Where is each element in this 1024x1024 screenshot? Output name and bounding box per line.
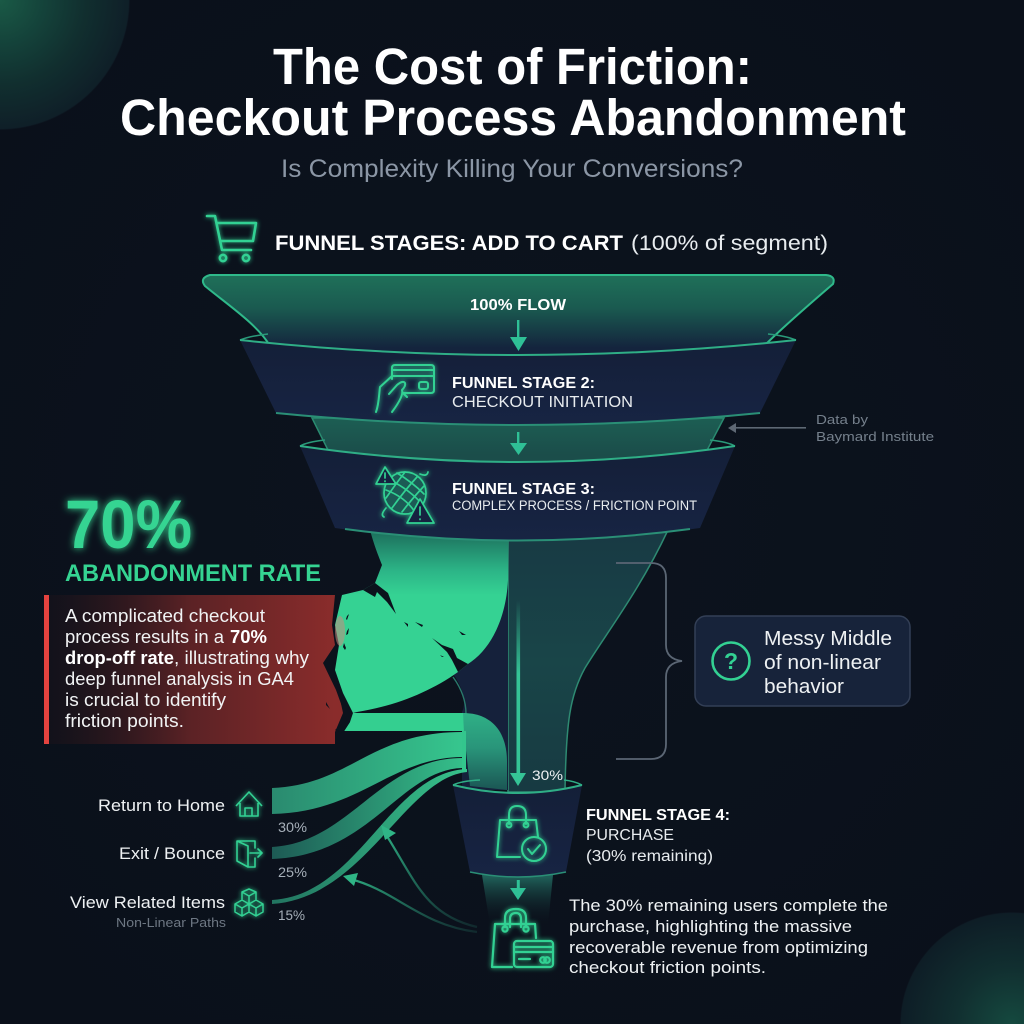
exit path: return to home	[272, 732, 462, 814]
brace: messy middle	[616, 563, 682, 759]
flow into lower funnel: strip	[344, 713, 464, 731]
arrow: non-linear return path two	[343, 873, 477, 932]
callout: messy middle	[695, 616, 910, 706]
arrow: retained 30 percent flow	[510, 600, 526, 786]
red panel torn edge	[335, 675, 343, 732]
stage 3 label: FUNNEL STAGE 3:	[452, 481, 595, 498]
callout text: 70%	[230, 627, 267, 647]
abandoned flow: torn green blob	[326, 530, 508, 713]
stage 4 label	[586, 807, 730, 865]
rim of stage 3	[300, 440, 735, 446]
torn dark edge	[323, 595, 358, 722]
title: The Cost of Friction:	[273, 38, 752, 95]
funnel navy interior	[420, 530, 508, 790]
callout text: process results in a	[65, 627, 225, 647]
retained flow: right teal funnel wall	[508, 530, 668, 792]
torn shard	[335, 720, 350, 733]
arrow: stage 4 to purchase	[510, 880, 526, 900]
callout text: Messy Middle	[764, 628, 892, 650]
15 percent exit: 15%	[278, 908, 305, 923]
summary text: purchase, highlighting the massive	[569, 918, 852, 936]
funnel tail below stage 4	[482, 875, 553, 925]
tear highlight	[335, 616, 345, 646]
stage 4 label: PURCHASE	[586, 827, 674, 844]
icon: question mark: ?	[724, 648, 738, 674]
icon: question mark	[712, 642, 750, 680]
arrow: pointer to funnel	[728, 423, 806, 433]
icon: door	[237, 841, 262, 867]
30 percent exit: 30%	[278, 820, 307, 835]
funnel stages heading: (100% of segment)	[631, 231, 828, 255]
funnel stage 4: purchase cup	[453, 780, 582, 877]
icon: bag with check	[497, 806, 546, 861]
title	[120, 38, 906, 146]
callout text: behavior	[764, 676, 844, 698]
stage 2 label	[452, 375, 633, 411]
red accent bar	[44, 595, 49, 744]
30 percent label: 30%	[532, 767, 563, 783]
funnel connector between stage 2 and 3	[312, 418, 724, 475]
icon: boxes	[235, 889, 263, 916]
callout text: deep funnel analysis in GA4	[65, 669, 294, 689]
funnel stage 1: add to cart	[203, 275, 834, 362]
view related items row	[70, 889, 263, 930]
stage 3 label	[452, 481, 697, 513]
funnel stages heading: FUNNEL STAGES: ADD TO CART	[275, 231, 623, 255]
return to home row	[98, 792, 262, 816]
red callout panel	[44, 595, 358, 744]
stage 2 label: FUNNEL STAGE 2:	[452, 375, 595, 392]
funnel band back rims	[240, 334, 796, 340]
flow label: 100% FLOW	[470, 297, 566, 314]
icon: hand holding card	[376, 365, 434, 412]
stage 4 label: FUNNEL STAGE 4:	[586, 807, 730, 824]
funnel stage 3: friction point	[300, 446, 735, 541]
callout text: A complicated checkout	[65, 606, 265, 626]
summary text: recoverable revenue from optimizing	[569, 939, 868, 957]
icon: shopping bag and card	[492, 909, 553, 967]
stat label: ABANDONMENT RATE	[65, 560, 321, 587]
source text: Baymard Institute	[816, 429, 934, 444]
abandonment rate stat	[65, 486, 321, 587]
decorative corner circle top left	[0, 0, 131, 131]
callout text: of non-linear	[764, 652, 881, 674]
exit or bounce row	[119, 841, 262, 867]
exit path labels	[70, 792, 307, 930]
callout text: is crucial to identify	[65, 690, 226, 710]
stage 3 label: COMPLEX PROCESS / FRICTION POINT	[452, 498, 697, 513]
arrow: stage 2 to 3	[510, 432, 527, 455]
arrow: non-linear return path one	[381, 825, 477, 927]
subtitle: Is Complexity Killing Your Conversions?	[281, 155, 743, 183]
icon: tangled globe with warnings	[376, 467, 434, 523]
stage 2 label: CHECKOUT INITIATION	[452, 394, 633, 411]
data source note	[728, 412, 934, 444]
icon: house	[236, 792, 262, 816]
view related items row: Non-Linear Paths	[116, 916, 226, 930]
funnel stage 2: checkout initiation	[240, 340, 796, 425]
exit or bounce row: Exit / Bounce	[119, 845, 225, 863]
stage 4 label: (30% remaining)	[586, 848, 713, 865]
25 percent exit: 25%	[278, 865, 307, 880]
callout text: , illustrating why	[174, 648, 309, 668]
callout text: friction points.	[65, 711, 184, 731]
crack marks	[326, 583, 468, 709]
source text: Data by	[816, 412, 869, 427]
view related items row: View Related Items	[70, 894, 225, 912]
callout text	[764, 628, 892, 698]
summary text	[569, 897, 888, 977]
exit path: exit or bounce	[272, 758, 462, 859]
flow into lower funnel: curve	[463, 713, 507, 790]
callout text: drop-off rate	[65, 648, 174, 668]
title: Checkout Process Abandonment	[120, 89, 906, 146]
funnel stages heading	[275, 231, 828, 255]
big percentage: 70%	[65, 486, 192, 563]
sankey merge column	[462, 731, 466, 772]
source text	[816, 412, 934, 444]
return to home row: Return to Home	[98, 797, 225, 815]
icon: shopping cart	[207, 216, 256, 261]
decorative corner circle bottom right	[899, 911, 1024, 1024]
summary text: checkout friction points.	[569, 959, 766, 977]
callout text	[65, 606, 309, 731]
exit path: view related items	[272, 769, 467, 904]
summary text: The 30% remaining users complete the	[569, 897, 888, 915]
arrow: stage 1 to 2	[510, 320, 527, 351]
